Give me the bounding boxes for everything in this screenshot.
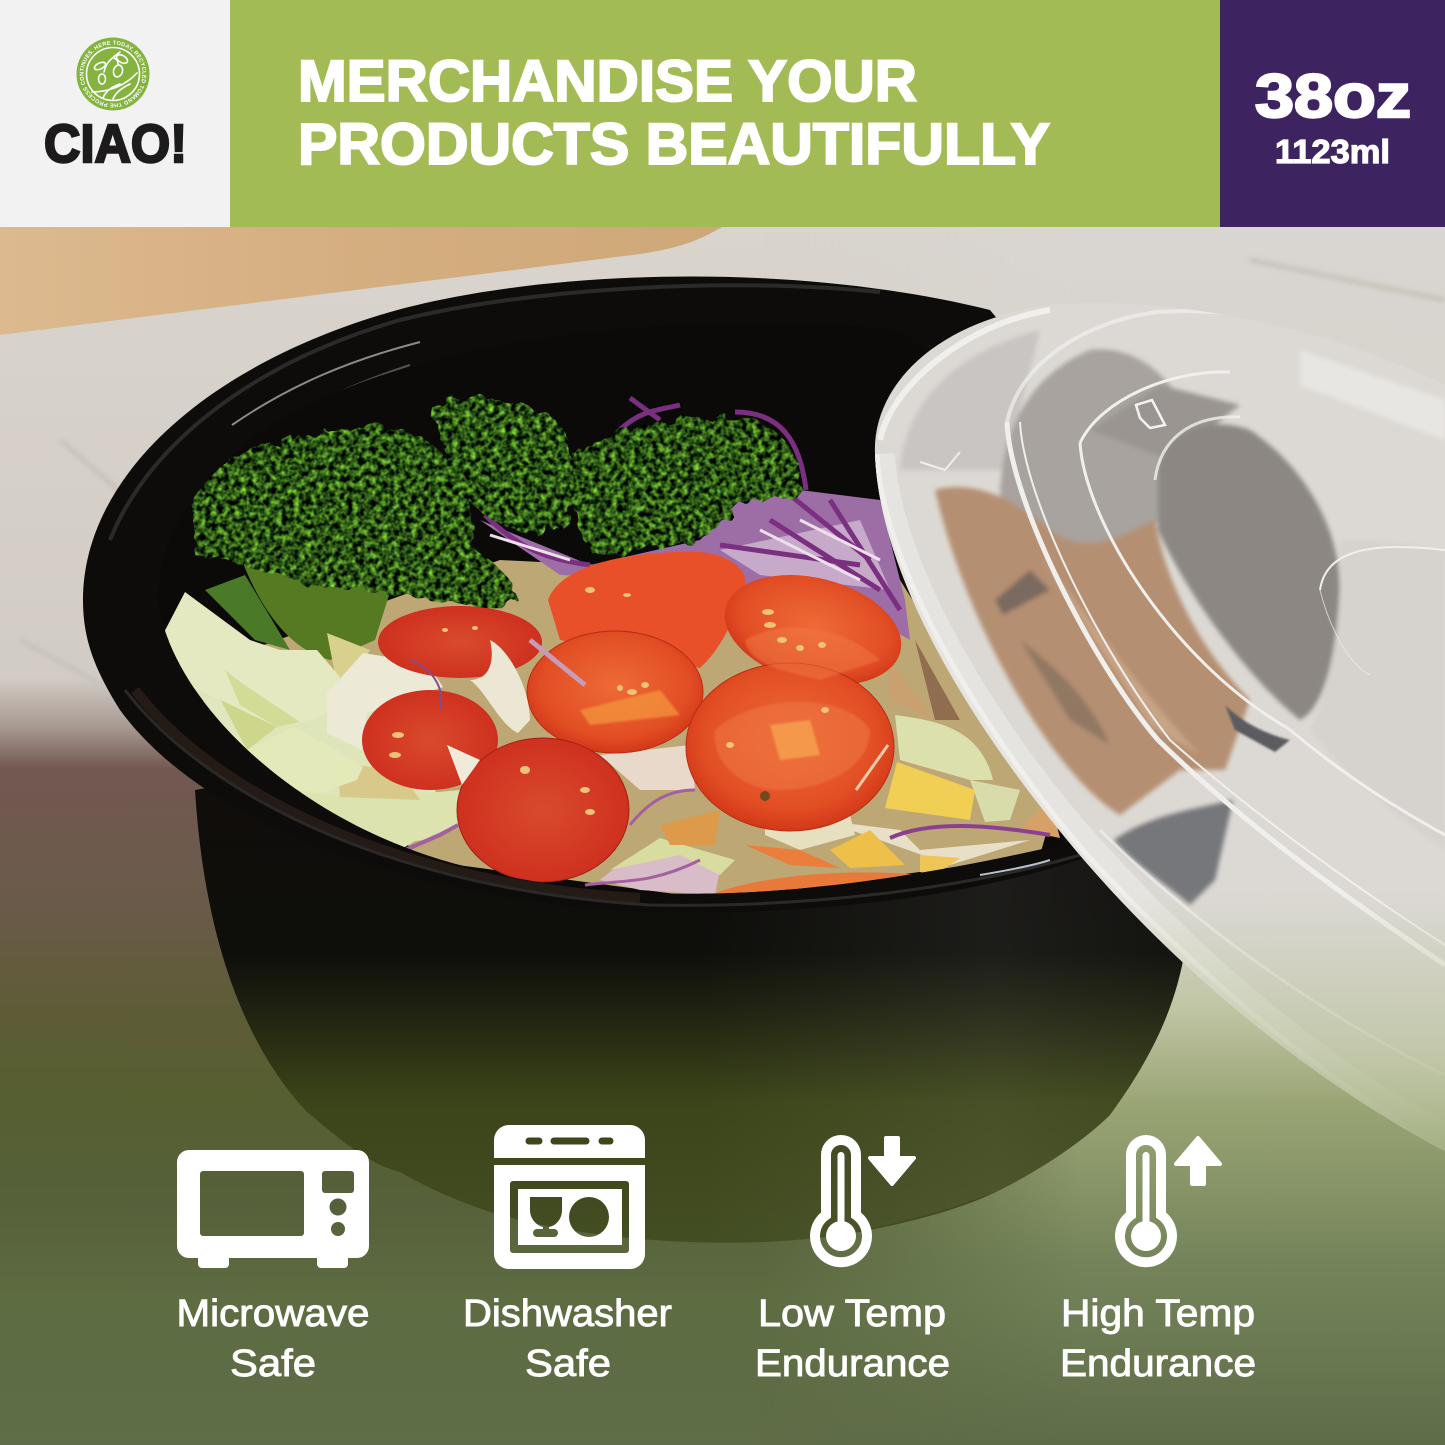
label [755,1293,950,1385]
capacity panel: 1123ml [1275,133,1390,170]
bowl body [195,700,1220,1243]
label: Microwave [176,1293,370,1335]
feature: high temp endurance [1060,1138,1256,1385]
recycling mark on lid [1136,400,1165,428]
label [463,1293,672,1385]
headline: PRODUCTS BEAUTIFULLY [298,112,1050,177]
feature: microwave safe [176,1150,370,1385]
label: Dishwasher [463,1293,672,1335]
food base [250,560,1050,900]
cabbage on tomatoes [470,640,530,733]
photo: clear plastic lid [870,303,1445,1160]
bowl rim [83,277,1230,913]
label [1060,1293,1256,1385]
tomato seeds [389,587,829,815]
purple cabbage [480,398,910,640]
label: Endurance [755,1343,950,1385]
headline panel [230,0,1220,227]
label: Safe [525,1343,611,1385]
carrots and corn [660,762,1060,896]
cutting board [0,227,722,335]
capacity panel: 38oz [1255,62,1411,130]
feature: low temp endurance [755,1138,950,1385]
salad [165,368,1060,894]
label: High Temp [1061,1293,1255,1335]
lettuce [160,592,1030,895]
icon: thermometer with up arrow [1120,1138,1220,1262]
photo: black bowl with salad [83,277,1230,1243]
tomato halves, back row [548,552,745,668]
logo panel [0,0,230,227]
feature: dishwasher safe [463,1125,672,1385]
lid ridges [877,310,1445,1148]
capacity panel [1220,0,1445,227]
rim highlights [110,285,1080,905]
soft shapes seen through the lid [900,330,1445,905]
label: Safe [230,1343,316,1385]
broccoli [190,397,800,660]
label: Low Temp [758,1293,946,1335]
icon: microwave [177,1150,369,1268]
logo wordmark: CIAO! [44,114,187,174]
label [176,1293,370,1385]
headline [298,49,1050,177]
tomatoes [362,552,1050,885]
icon: dishwasher [494,1125,645,1269]
label: Endurance [1060,1343,1256,1385]
header bar [0,0,1445,227]
lid fade [1138,913,1445,1151]
icon: thermometer with down arrow [815,1138,914,1262]
logo badge [76,38,150,110]
headline: MERCHANDISE YOUR [298,49,917,114]
tomato flesh [745,627,880,680]
